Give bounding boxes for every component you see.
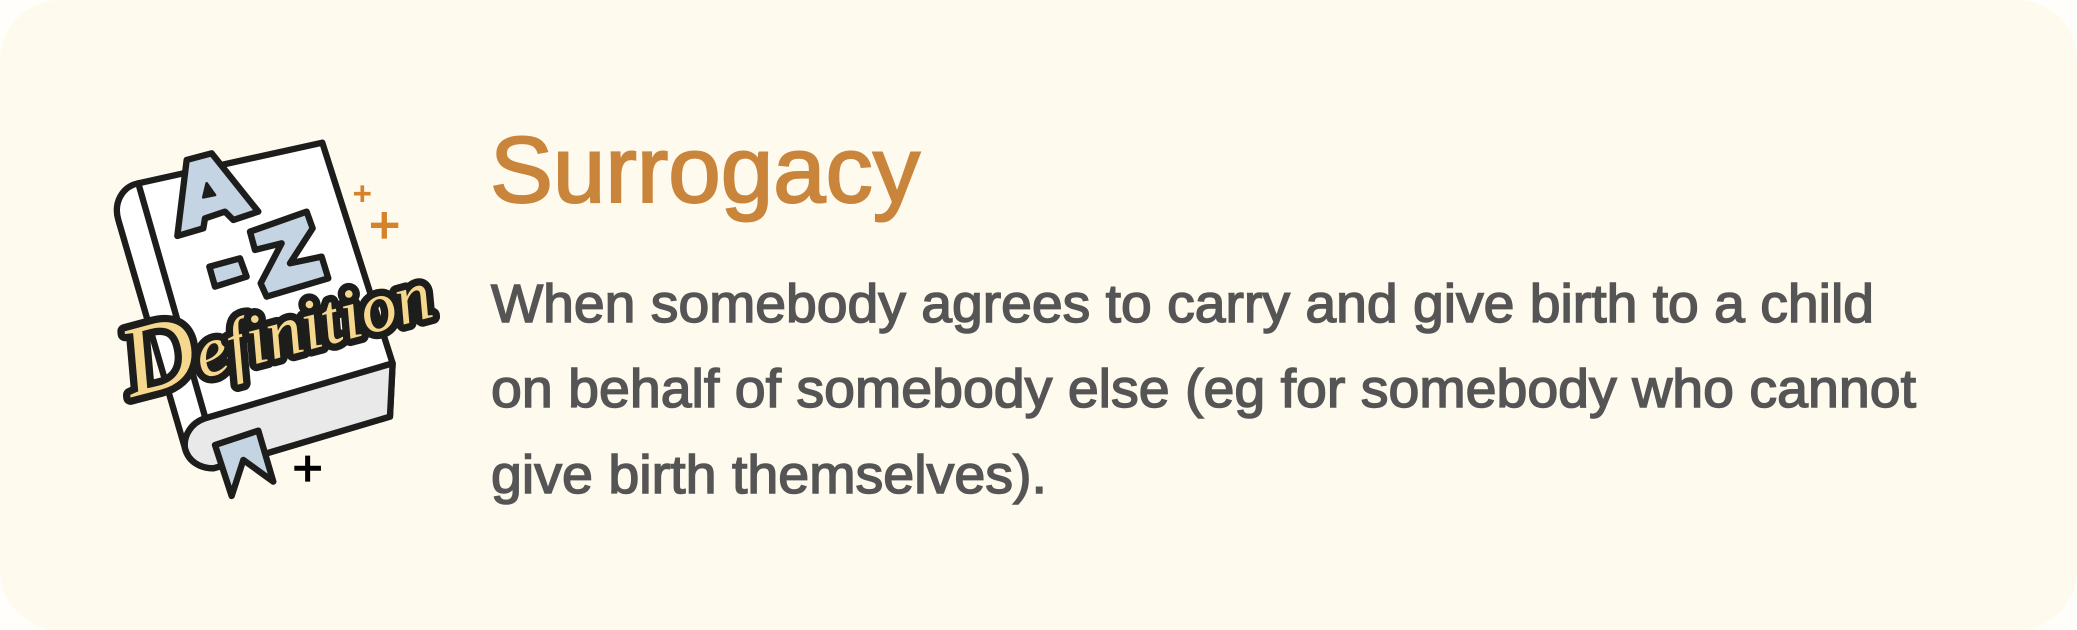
icon: definition book: Definition <box>107 230 442 419</box>
definition text: on behalf of somebody else (eg for somebody who cannot <box>491 359 1916 419</box>
title: Surrogacy <box>490 117 920 222</box>
definition text: give birth themselves). <box>491 445 1047 505</box>
definition text: When somebody agrees to carry and give birth to a child <box>491 274 1874 334</box>
definition text <box>491 274 1916 505</box>
icon: definition book <box>107 143 442 496</box>
